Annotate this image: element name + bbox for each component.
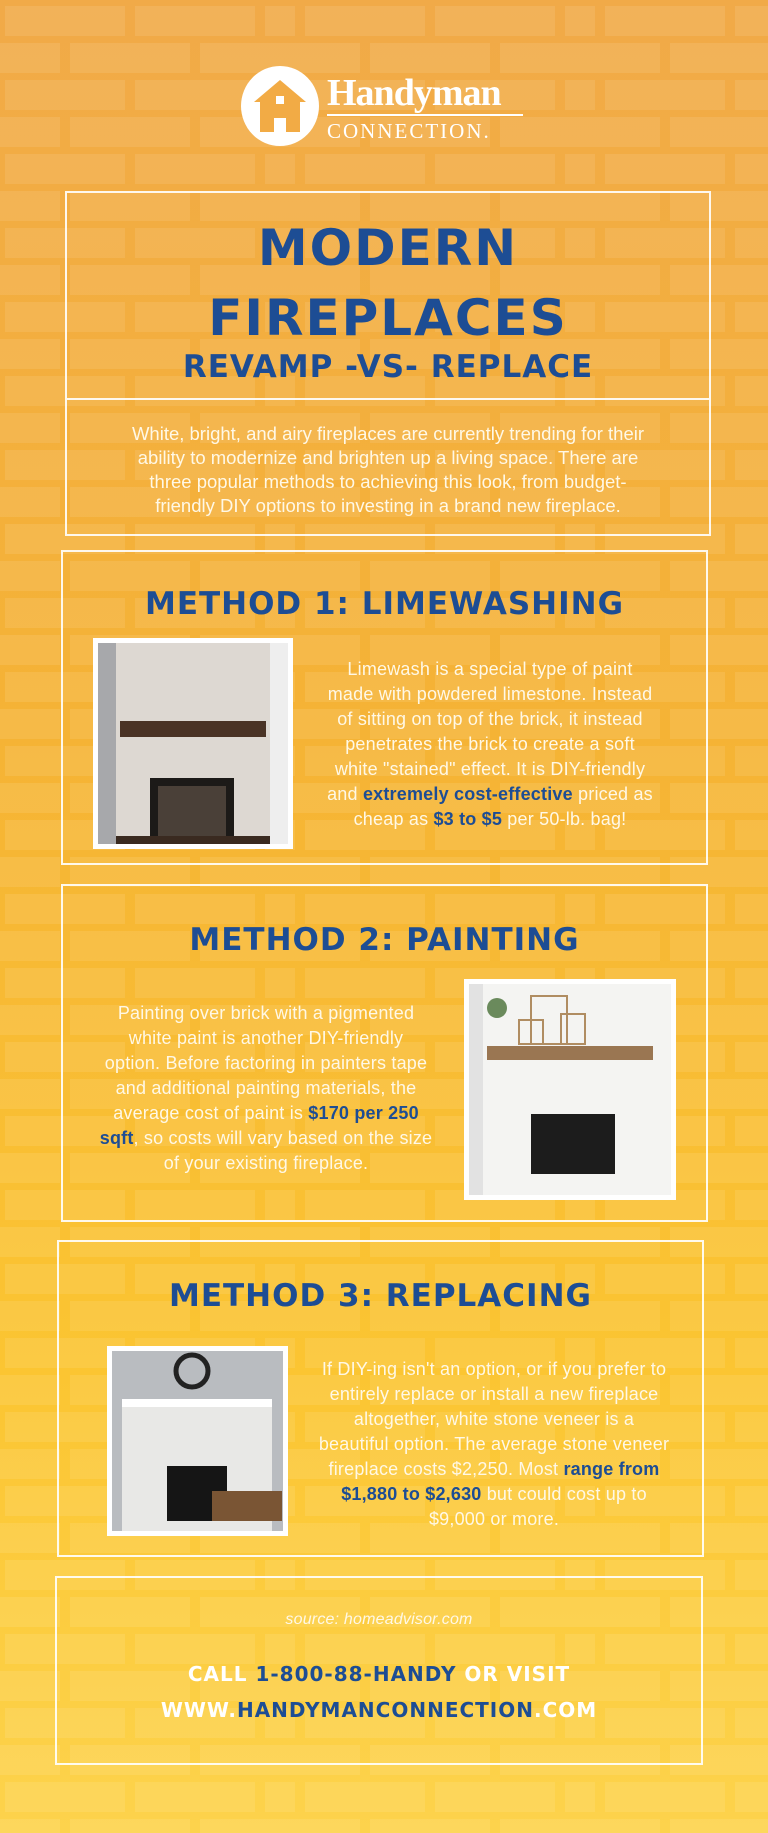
heading: METHOD 2: PAINTING (189, 922, 580, 958)
intro text (132, 423, 644, 516)
panel: method 2 (61, 884, 708, 1222)
panel: title (65, 191, 711, 536)
photo: limewashed fireplace (93, 638, 293, 849)
title: FIREPLACES (208, 289, 568, 347)
panel: footer (55, 1576, 703, 1765)
icon: house in circle (241, 66, 319, 146)
text: $9,000 or more. (429, 1509, 559, 1529)
text: beautiful option. The average stone veneer (319, 1434, 669, 1454)
text: $1,880 to $2,630 but could cost up to (341, 1484, 647, 1504)
text: sqft, so costs will vary based on the size (100, 1128, 432, 1148)
title (208, 219, 568, 347)
call to action (161, 1662, 597, 1722)
text: white paint is another DIY-friendly (129, 1028, 403, 1048)
text: penetrates the brick to create a soft (345, 734, 635, 754)
intro text: White, bright, and airy fireplaces are currently trending for their (132, 423, 644, 444)
logo (241, 66, 523, 146)
text: entirely replace or install a new fireplace (330, 1384, 658, 1404)
text: made with powdered limestone. Instead (328, 684, 652, 704)
logo text: Handyman (327, 72, 501, 114)
text: cheap as $3 to $5 per 50-lb. bag! (354, 809, 626, 829)
heading: METHOD 1: LIMEWASHING (145, 586, 624, 622)
source: source: homeadvisor.com (285, 1611, 473, 1628)
call to action: CALL 1-800-88-HANDY OR VISIT (188, 1662, 570, 1686)
panel: method 3 (57, 1240, 704, 1557)
panel: method 1 (61, 550, 708, 865)
text: If DIY-ing isn't an option, or if you prefer to (322, 1359, 666, 1379)
text (319, 1359, 669, 1529)
text (327, 659, 653, 829)
intro text: friendly DIY options to investing in a brand new fireplace. (155, 495, 621, 516)
text: average cost of paint is $170 per 250 (113, 1103, 419, 1123)
text: and extremely cost-effective priced as (327, 784, 653, 804)
text: and additional painting materials, the (116, 1078, 416, 1098)
logo: CONNECTION. (327, 119, 491, 143)
subtitle: REVAMP -VS- REPLACE (183, 349, 593, 385)
photo: stone veneer fireplace (107, 1346, 288, 1536)
call to action: WWW.HANDYMANCONNECTION.COM (161, 1698, 597, 1722)
text: of your existing fireplace. (164, 1153, 368, 1173)
intro text: ability to modernize and brighten up a living space. There are (138, 447, 638, 468)
text (100, 1003, 432, 1173)
text: altogether, white stone veneer is a (354, 1409, 634, 1429)
text: white "stained" effect. It is DIY-friendly (335, 759, 645, 779)
photo: painted fireplace (464, 979, 676, 1200)
intro text: three popular methods to achieving this look, from budget- (149, 471, 627, 492)
text: Painting over brick with a pigmented (118, 1003, 414, 1023)
title: MODERN (258, 219, 518, 277)
text: fireplace costs $2,250. Most range from (329, 1459, 659, 1479)
text: of sitting on top of the brick, it instead (337, 709, 643, 729)
text: Limewash is a special type of paint (347, 659, 633, 679)
heading: METHOD 3: REPLACING (169, 1278, 592, 1314)
text: option. Before factoring in painters tape (105, 1053, 427, 1073)
